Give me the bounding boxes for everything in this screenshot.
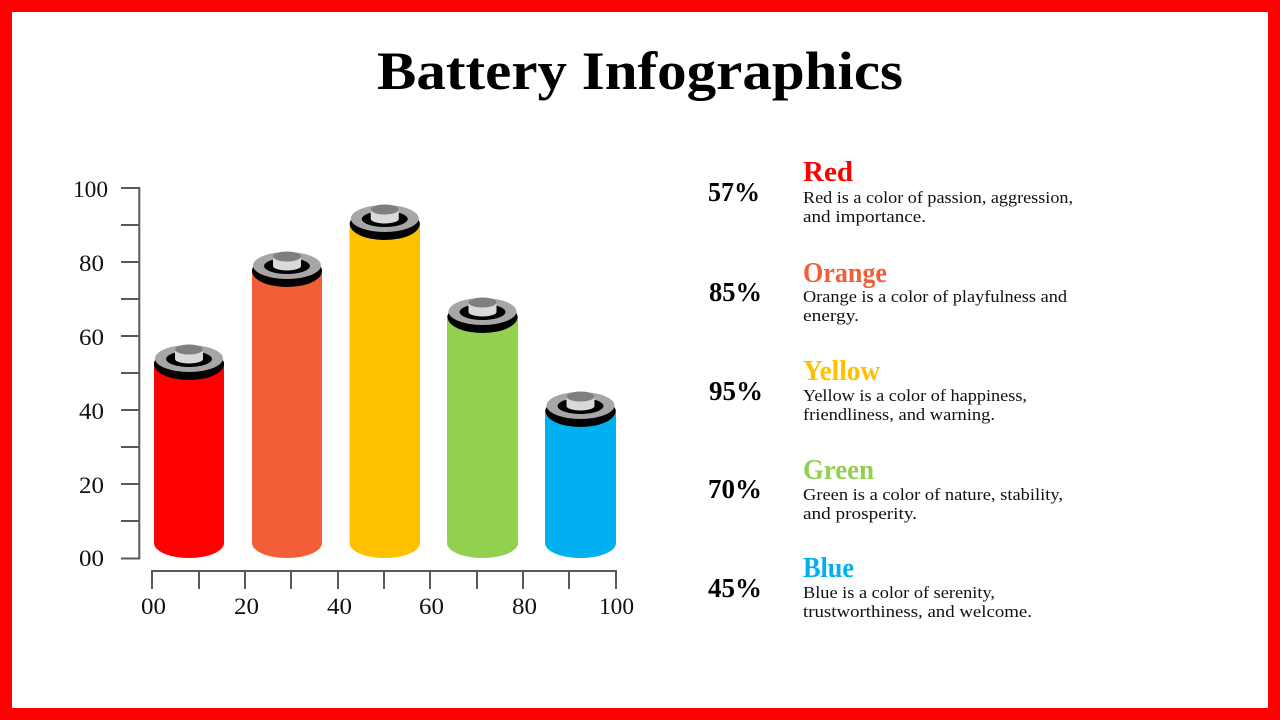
legend item: red: Red [803, 157, 853, 188]
legend item: yellow [709, 356, 1027, 424]
battery: red [154, 344, 224, 558]
y axis: 60 [79, 325, 104, 350]
y axis: 80 [79, 251, 104, 276]
legend item: green: Green is a color of nature, stability, [803, 485, 1063, 504]
legend item: green [708, 455, 1063, 523]
x axis [141, 571, 634, 619]
x axis: 40 [327, 594, 352, 619]
legend item: blue: trustworthiness, and welcome. [803, 602, 1032, 621]
x axis: 20 [234, 594, 259, 619]
y axis: 100 [73, 177, 108, 202]
legend item: blue: 45% [708, 573, 762, 603]
legend item: red: and importance. [803, 207, 926, 226]
battery: orange [252, 252, 322, 558]
legend item: green: and prosperity. [803, 504, 917, 523]
legend item: orange: Orange is a color of playfulness and [803, 287, 1068, 306]
title: Battery Infographics [377, 41, 903, 101]
legend item: blue: Blue is a color of serenity, [803, 583, 995, 602]
y axis: 20 [79, 473, 104, 498]
legend item: blue [708, 553, 1032, 621]
legend [708, 157, 1073, 621]
battery: yellow [350, 204, 420, 558]
x axis: 80 [512, 594, 537, 619]
y axis: 00 [79, 546, 104, 571]
legend item: orange [709, 258, 1068, 325]
legend item: orange: energy. [803, 306, 859, 325]
legend item: orange: 85% [709, 277, 762, 307]
battery: green [447, 298, 518, 558]
legend item: green: 70% [708, 474, 762, 504]
legend item: yellow: friendliness, and warning. [803, 405, 995, 424]
legend item: blue: Blue [803, 553, 854, 584]
legend item: yellow: 95% [709, 376, 763, 406]
x axis: 00 [141, 594, 166, 619]
legend item: orange: Orange [803, 258, 887, 289]
chart: battery levels [73, 177, 634, 619]
y axis: 40 [79, 399, 104, 424]
legend item: red [708, 157, 1073, 226]
legend item: yellow: Yellow [803, 356, 881, 387]
y axis [73, 177, 139, 571]
legend item: yellow: Yellow is a color of happiness, [803, 386, 1027, 405]
legend item: green: Green [803, 455, 874, 486]
legend item: red: 57% [708, 177, 760, 207]
battery: blue [545, 392, 616, 558]
x axis: 60 [419, 594, 444, 619]
x axis: 100 [599, 594, 634, 619]
legend item: red: Red is a color of passion, aggression, [803, 188, 1073, 207]
